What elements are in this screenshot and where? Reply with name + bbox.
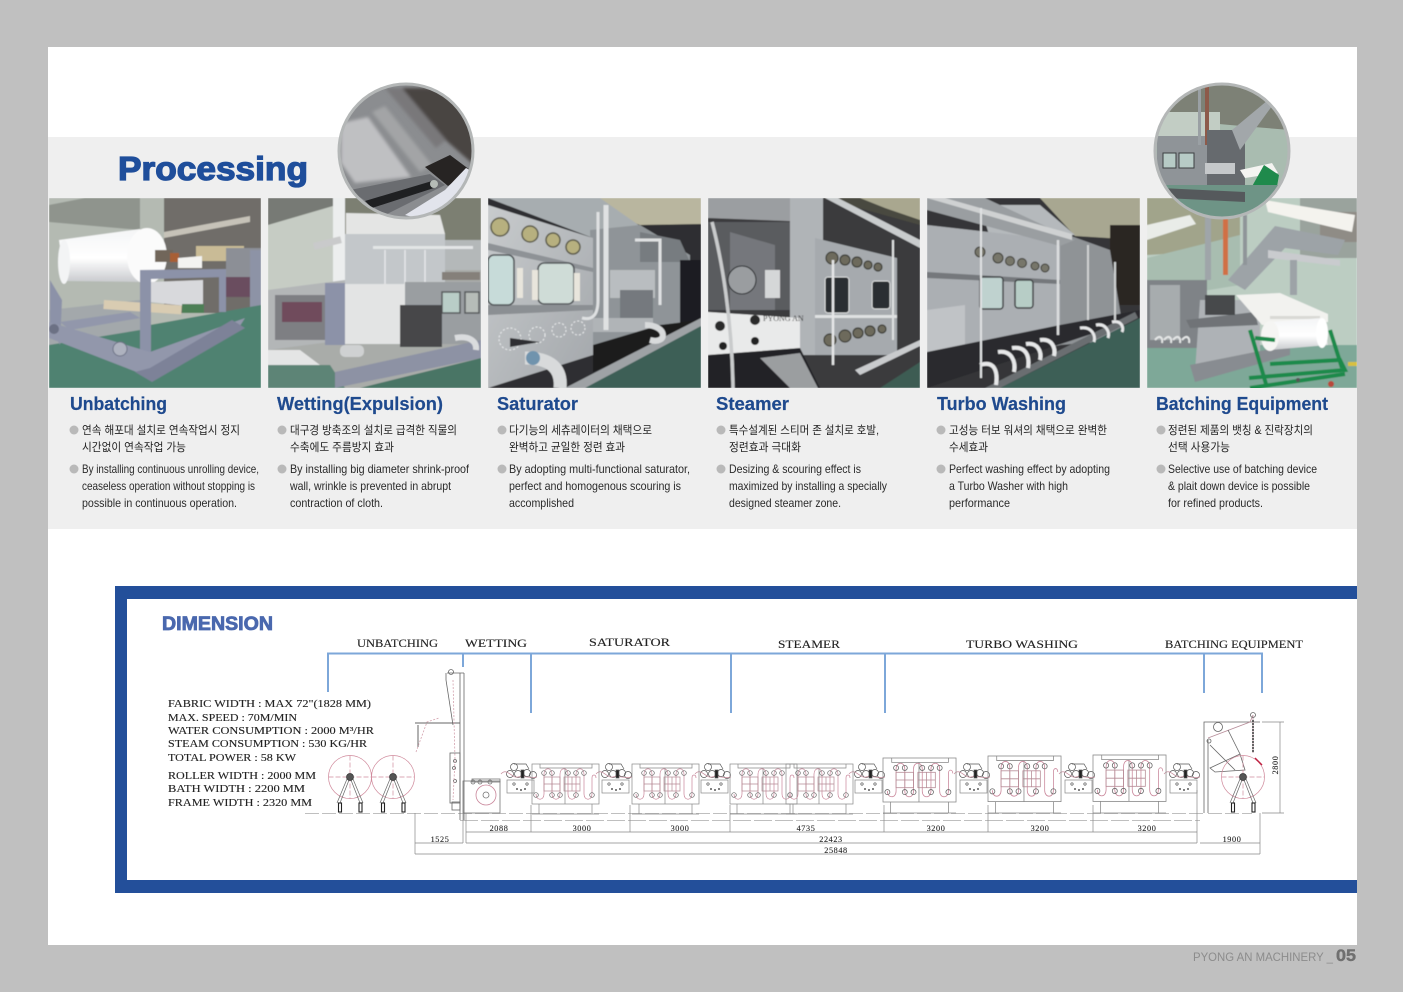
footer: page label: PYONG AN MACHINERY _ xyxy=(1193,950,1333,964)
dimension values: 22423 xyxy=(819,835,843,844)
English text xyxy=(289,462,470,510)
bullet xyxy=(278,426,286,434)
photo: Saturator xyxy=(488,198,701,388)
title: Processing: Processing xyxy=(118,150,308,187)
bullet xyxy=(716,426,726,434)
English text: perfect and homogenous scouring is xyxy=(509,479,681,493)
bullet xyxy=(1156,464,1166,474)
dimension values: 3200 xyxy=(1031,824,1049,833)
pad units xyxy=(501,764,1200,793)
turbo washer tanks xyxy=(883,755,1166,813)
unbatching tower xyxy=(415,670,464,820)
section labels: UNBATCHING xyxy=(357,638,438,650)
footer: page label: 05 xyxy=(1336,946,1356,965)
specification list: STEAM CONSUMPTION : 530 KG/HR xyxy=(168,739,367,750)
heading: Saturator xyxy=(497,394,578,414)
English text: for refined products. xyxy=(1168,496,1263,510)
specification list: FRAME WIDTH : 2320 MM xyxy=(168,798,313,809)
Korean text: 정련된 제품의 뱃칭 & 진락장치의 xyxy=(1168,424,1313,437)
Korean text: 다기능의 세츄레이터의 채택으로 xyxy=(509,424,652,437)
dimension values: 3200 xyxy=(1138,824,1156,833)
specification list: MAX. SPEED : 70M/MIN xyxy=(168,713,297,724)
English text: a Turbo Washer with high xyxy=(949,479,1068,493)
column: Steamer xyxy=(716,394,887,510)
English text: & plait down device is possible xyxy=(1168,479,1310,493)
English text: accomplished xyxy=(509,496,574,510)
saturator and steamer tanks xyxy=(532,764,853,814)
specification list xyxy=(168,699,374,809)
section brackets xyxy=(328,654,1262,713)
column: Batching Equipment xyxy=(1156,394,1328,510)
English text xyxy=(729,462,887,510)
specification list: BATH WIDTH : 2200 MM xyxy=(168,784,306,795)
Korean text: 대구경 방축조의 설치로 급격한 직물의 xyxy=(290,423,457,437)
Korean text: 특수설계된 스티머 존 설치로 호발, xyxy=(729,424,879,437)
bullet xyxy=(716,464,726,474)
English text: maximized by installing a specially xyxy=(729,479,887,493)
unwinding stands xyxy=(328,756,414,812)
Korean text xyxy=(509,424,652,454)
English text: By installing big diameter shrink-proof xyxy=(290,462,470,476)
photo: Unbatching xyxy=(49,198,261,388)
bullet xyxy=(936,426,946,434)
English text xyxy=(949,462,1110,510)
dimension values: 1525 xyxy=(431,835,449,844)
section labels: BATCHING EQUIPMENT xyxy=(1165,639,1303,651)
heading: Unbatching xyxy=(70,394,167,414)
dimension lines xyxy=(415,722,1284,854)
dimension values: 4735 xyxy=(797,824,815,833)
heading: Wetting(Expulsion) xyxy=(277,394,443,414)
wetting bath xyxy=(463,779,500,813)
specification list: ROLLER WIDTH : 2000 MM xyxy=(168,771,317,782)
English text xyxy=(82,462,259,510)
section labels xyxy=(357,637,1303,651)
English text: By adopting multi-functional saturator, xyxy=(509,462,690,476)
photo: Steamer xyxy=(708,198,920,388)
dimension values: 25848 xyxy=(824,846,848,855)
column: Saturator xyxy=(497,394,690,510)
Korean text: 정련효과 극대화 xyxy=(729,441,801,454)
Korean text: 수세효과 xyxy=(949,441,988,454)
bullet xyxy=(278,464,286,474)
photo: Batching Equipment xyxy=(1147,198,1357,388)
Korean text: 연속 해포대 설치로 연속작업시 정지 xyxy=(82,424,240,437)
photo: Wetting xyxy=(268,198,481,388)
dimension values: 2800 xyxy=(1271,756,1280,774)
specification list: FABRIC WIDTH : MAX 72"(1828 MM) xyxy=(168,699,372,710)
Korean text: 선택 사용가능 xyxy=(1168,441,1230,454)
column: Wetting xyxy=(277,394,470,510)
column: Unbatching xyxy=(70,394,259,510)
bullet xyxy=(498,426,506,434)
English text: wall, wrinkle is prevented in abrupt xyxy=(289,479,452,493)
detail circle: production line view xyxy=(1154,83,1290,219)
English text: Selective use of batching device xyxy=(1168,462,1317,476)
English text: possible in continuous operation. xyxy=(82,496,237,510)
detail circle: fabric close-up xyxy=(338,83,474,219)
heading: Batching Equipment xyxy=(1156,394,1328,414)
English text: performance xyxy=(949,496,1010,510)
footer: page label xyxy=(1193,946,1356,965)
photo: Steamer: PYONG AN xyxy=(763,314,804,323)
Korean text xyxy=(729,424,879,454)
dimension values: 3200 xyxy=(927,824,945,833)
Korean text xyxy=(1168,424,1313,454)
English text xyxy=(1168,462,1317,510)
section labels: SATURATOR xyxy=(589,637,671,649)
bullet xyxy=(70,464,78,474)
dimension values xyxy=(431,756,1280,855)
English text: By installing continuous unrolling device, xyxy=(82,462,259,476)
Korean text xyxy=(949,424,1107,454)
photo: Turbo Washing xyxy=(927,198,1140,388)
heading: DIMENSION: DIMENSION xyxy=(162,614,273,635)
dimension values: 3000 xyxy=(573,824,591,833)
heading: Steamer xyxy=(716,394,789,414)
bullet xyxy=(1156,426,1166,434)
specification list: WATER CONSUMPTION : 2000 M³/HR xyxy=(168,726,374,737)
dimension values: 2088 xyxy=(490,824,508,833)
Korean text xyxy=(290,423,457,454)
machine line drawing xyxy=(305,670,1284,855)
processing band xyxy=(48,137,1357,529)
dimension values: 3000 xyxy=(671,824,689,833)
section labels: STEAMER xyxy=(778,639,841,651)
Korean text: 완벽하고 균일한 정련 효과 xyxy=(509,440,625,454)
Korean text: 고성능 터보 워셔의 채택으로 완벽한 xyxy=(949,424,1107,437)
Korean text xyxy=(82,424,240,454)
column: Turbo Washing xyxy=(936,394,1110,510)
Korean text: 수축에도 주름방지 효과 xyxy=(290,441,394,454)
Korean text: 시간없이 연속작업 가능 xyxy=(82,441,186,454)
bullet xyxy=(936,464,946,474)
section labels: TURBO WASHING xyxy=(966,639,1078,651)
English text: designed steamer zone. xyxy=(729,496,841,510)
bullet xyxy=(70,426,78,434)
batching unit xyxy=(1204,712,1264,813)
floor lines xyxy=(305,812,1252,814)
specification list: TOTAL POWER : 58 KW xyxy=(168,753,296,764)
English text: ceaseless operation without stopping is xyxy=(82,479,255,493)
English text: Perfect washing effect by adopting xyxy=(949,462,1110,476)
English text: contraction of cloth. xyxy=(290,496,383,510)
bullet xyxy=(498,464,506,474)
heading: Turbo Washing xyxy=(937,394,1066,414)
section labels: WETTING xyxy=(465,638,527,650)
panel: dimension frame xyxy=(115,586,1357,893)
English text xyxy=(509,462,690,510)
dimension values: 1900 xyxy=(1223,835,1241,844)
English text: Desizing & scouring effect is xyxy=(729,462,861,476)
